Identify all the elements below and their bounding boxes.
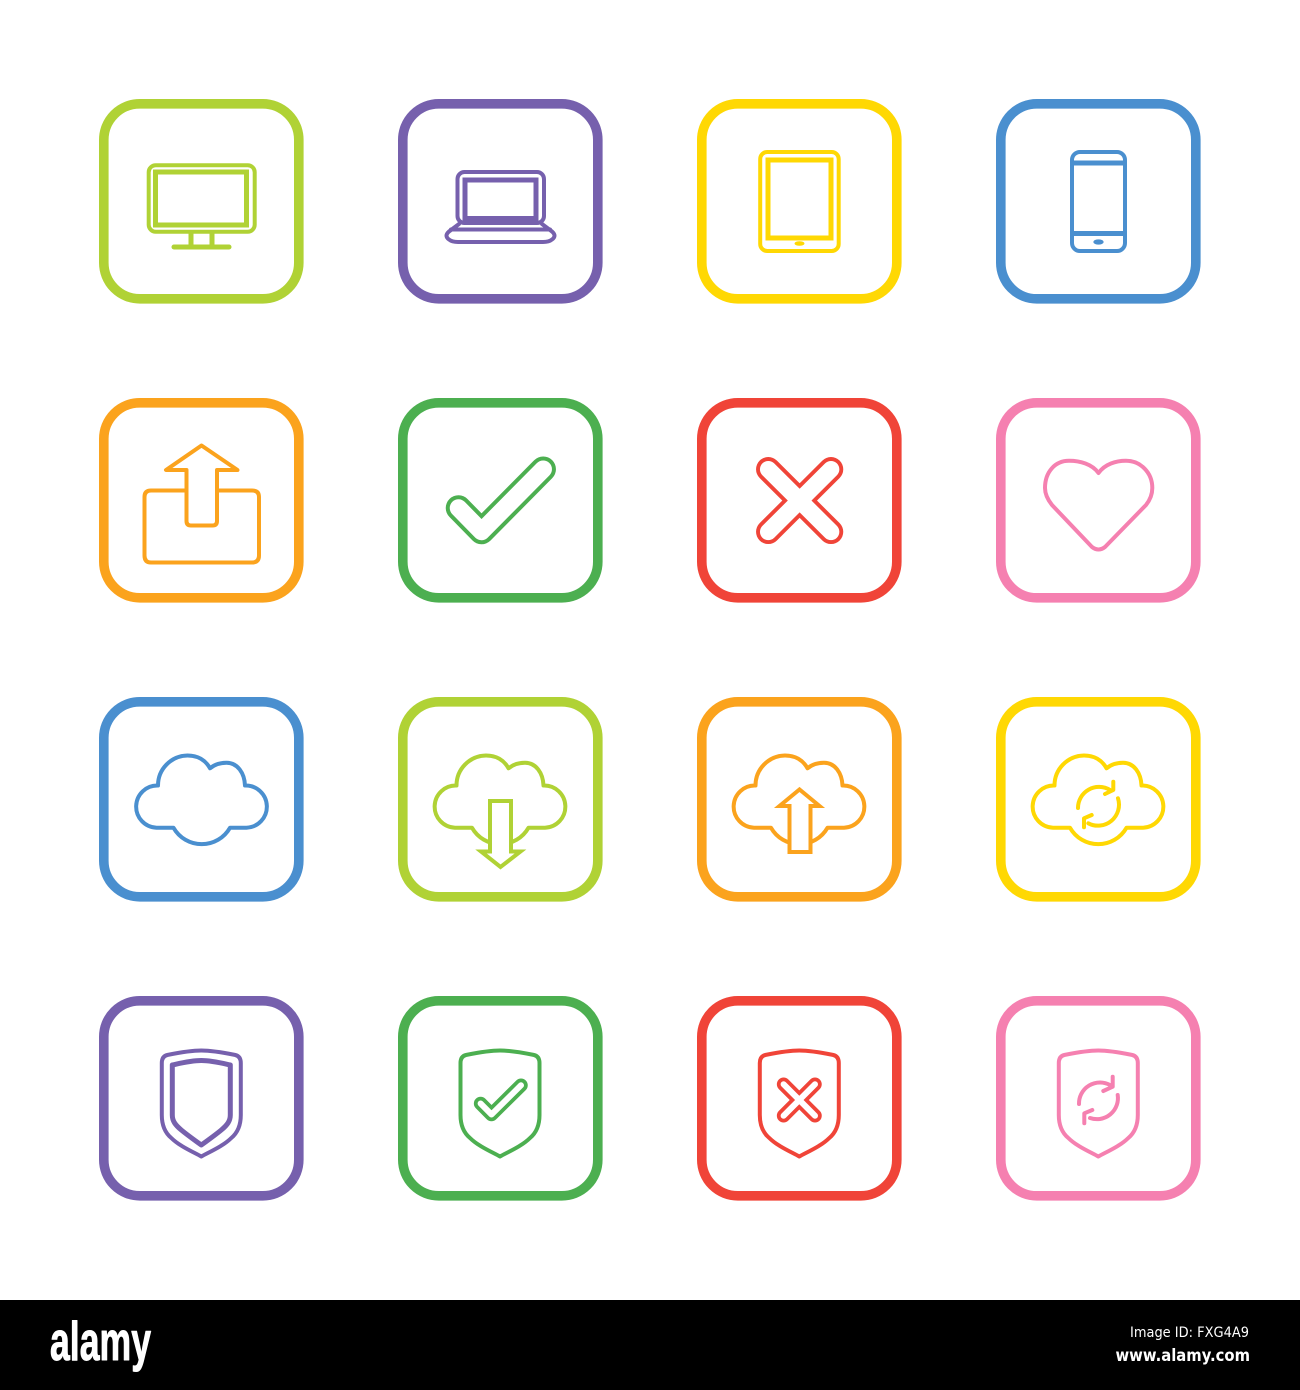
frame bbox=[403, 1001, 598, 1196]
frame bbox=[403, 104, 598, 299]
panel: laptop bbox=[403, 104, 598, 299]
icon: check mark bbox=[458, 469, 543, 532]
icon: shield sync bbox=[1059, 1050, 1138, 1156]
panel: shield check bbox=[403, 1001, 598, 1196]
icon: shield cross bbox=[760, 1050, 839, 1156]
panel: upload bbox=[104, 403, 299, 598]
panel: tablet bbox=[702, 104, 897, 299]
frame bbox=[702, 702, 897, 897]
frame bbox=[1001, 403, 1196, 598]
panel: shield bbox=[104, 1001, 299, 1196]
frame bbox=[403, 702, 598, 897]
logo: alamy: alamy bbox=[50, 1310, 151, 1372]
panel: cloud download bbox=[403, 702, 598, 897]
frame bbox=[1001, 104, 1196, 299]
panel: cloud sync bbox=[1001, 702, 1196, 897]
icon: laptop bbox=[446, 172, 554, 242]
frame bbox=[1001, 1001, 1196, 1196]
icon: cross bbox=[768, 469, 831, 532]
panel: heart bbox=[1001, 403, 1196, 598]
footer bar bbox=[0, 1300, 1300, 1390]
icon: cloud upload bbox=[734, 756, 864, 852]
image id: Image ID: FXG4A9 bbox=[1130, 1325, 1249, 1341]
website: www.alamy.com bbox=[1116, 1346, 1250, 1366]
panel: cloud bbox=[104, 702, 299, 897]
frame bbox=[104, 1001, 299, 1196]
panel: monitor bbox=[104, 104, 299, 299]
icon: cloud bbox=[136, 756, 267, 844]
icon: shield check bbox=[460, 1050, 540, 1156]
icon: tablet bbox=[760, 152, 839, 251]
icon: cloud download bbox=[435, 756, 565, 867]
frame bbox=[702, 403, 897, 598]
frame bbox=[403, 403, 598, 598]
panel: smartphone bbox=[1001, 104, 1196, 299]
panel: shield sync bbox=[1001, 1001, 1196, 1196]
icon: cloud sync bbox=[1033, 756, 1163, 844]
frame bbox=[104, 702, 299, 897]
frame bbox=[1001, 702, 1196, 897]
panel: cloud upload bbox=[702, 702, 897, 897]
panel: check bbox=[403, 403, 598, 598]
icon: smartphone bbox=[1072, 152, 1125, 251]
panel: cross bbox=[702, 403, 897, 598]
frame bbox=[702, 1001, 897, 1196]
icon: monitor bbox=[149, 165, 255, 247]
frame bbox=[702, 104, 897, 299]
panel: shield cross bbox=[702, 1001, 897, 1196]
icon: shield bbox=[162, 1050, 241, 1156]
frame bbox=[104, 403, 299, 598]
icon: upload tray bbox=[144, 446, 259, 562]
frame bbox=[104, 104, 299, 299]
icon: heart bbox=[1045, 461, 1152, 550]
